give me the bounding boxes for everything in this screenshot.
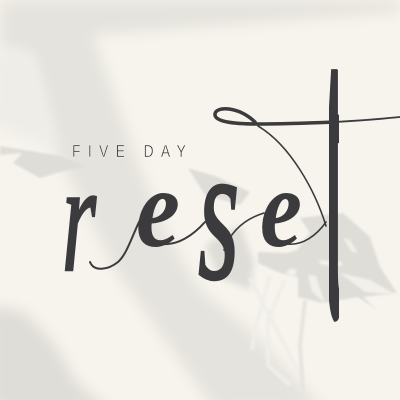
- leaf highlights: [285, 238, 397, 303]
- leaf shadows: [0, 146, 397, 310]
- subtitle: FIVE DAY: FIVE DAY: [72, 141, 186, 161]
- swash: long curve into stem: [258, 126, 326, 226]
- title lettering: reset: [64, 69, 339, 322]
- swash: second e to stem: [263, 222, 326, 244]
- letter r: r: [62, 132, 97, 305]
- swash: crossbar and loop: [215, 109, 335, 124]
- letter e, second: e: [260, 146, 302, 271]
- plant stem shadows: [250, 275, 305, 390]
- swash: r tail to first e: [90, 220, 140, 269]
- swash: first e to s: [140, 222, 205, 244]
- decorative connecting swashes: [90, 109, 400, 269]
- letter s: s: [198, 104, 239, 322]
- swash: thin crossbar end: [335, 117, 400, 122]
- swash: s to second e: [224, 213, 264, 250]
- letter e: e: [136, 146, 180, 270]
